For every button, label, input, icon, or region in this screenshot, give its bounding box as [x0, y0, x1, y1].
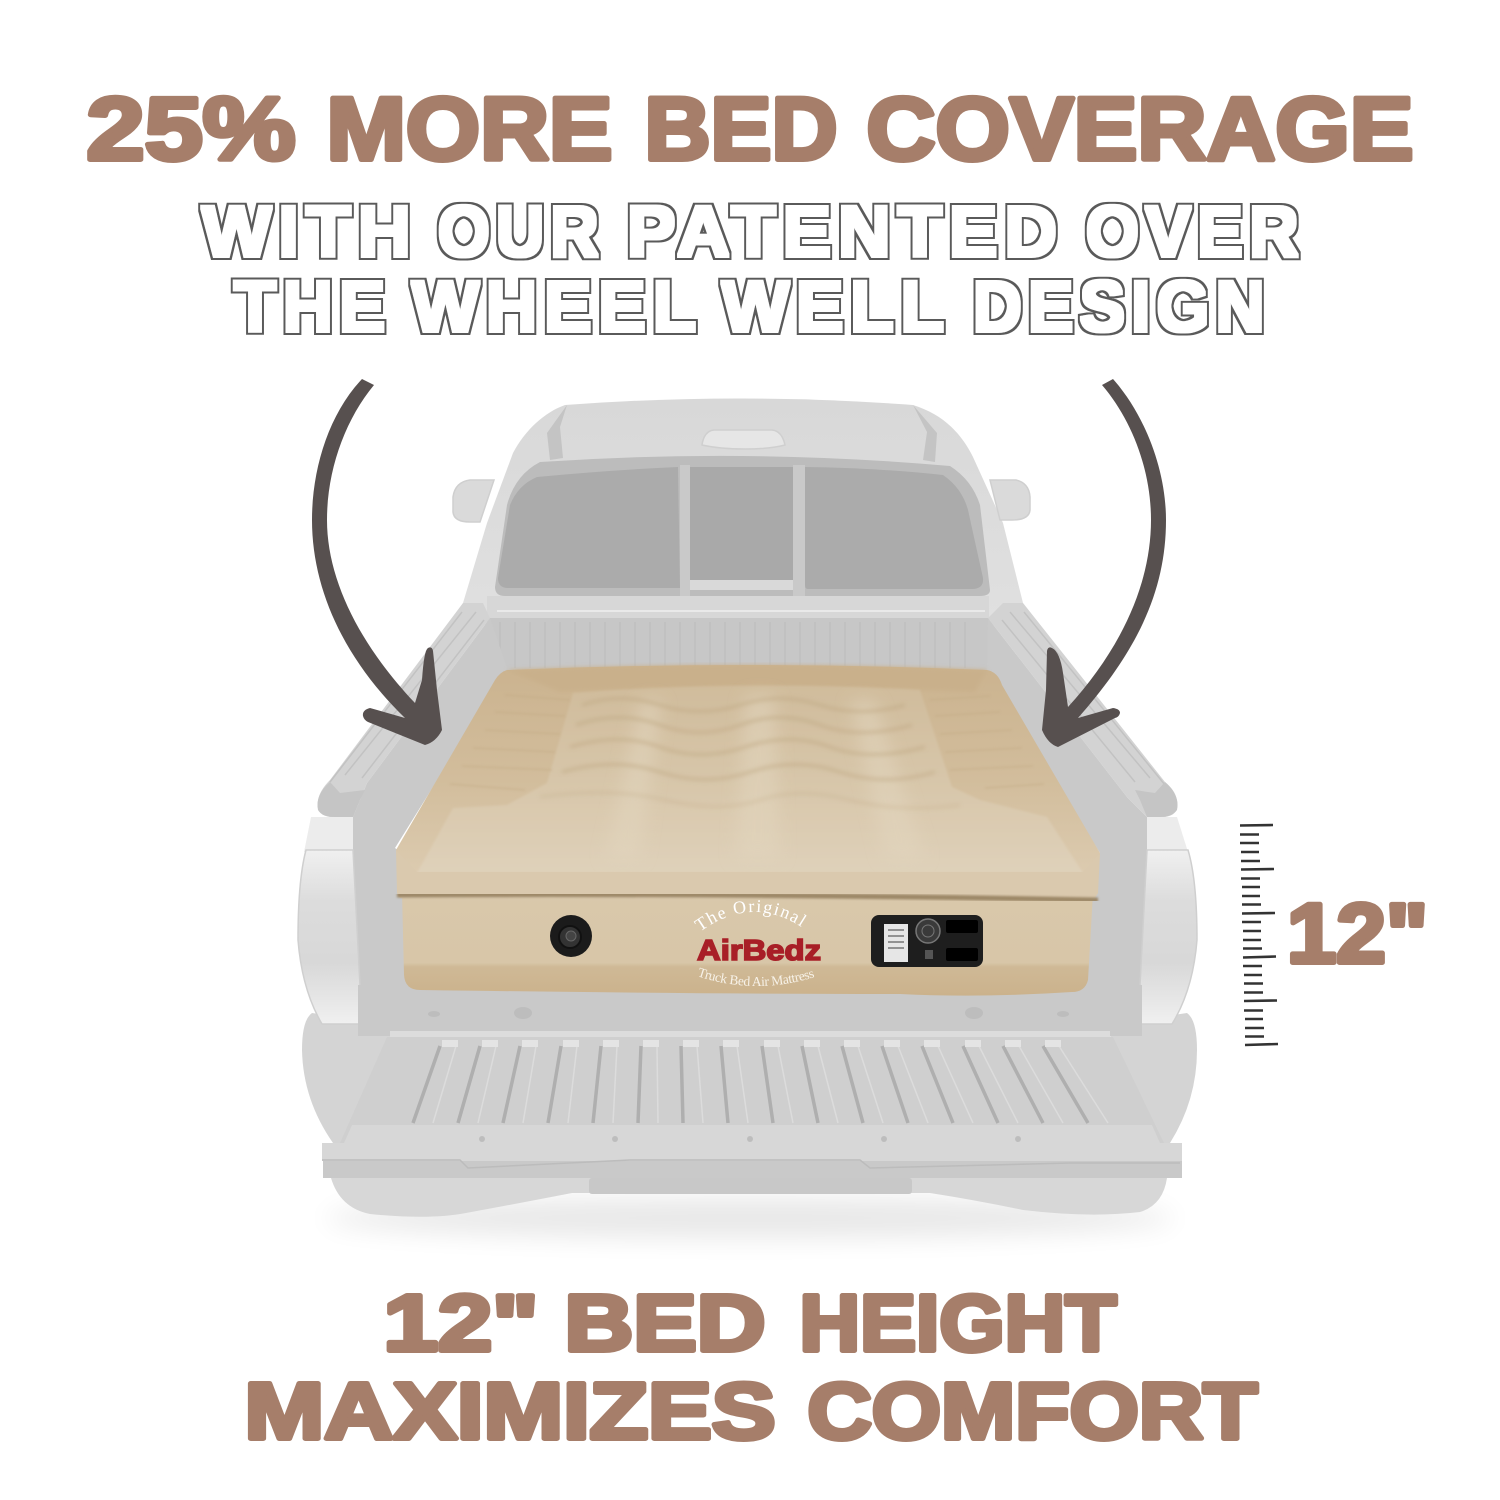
left wall: [353, 618, 507, 1000]
tailgate lip: [322, 1143, 1182, 1161]
caption: bed height: MAXIMIZES: [244, 1366, 776, 1456]
logo: AirBedz: [697, 935, 821, 967]
caption: bed height: 12": [384, 1278, 538, 1368]
caption: bed height: HEIGHT: [800, 1278, 1117, 1368]
subtitle: outlined text: PATENTED: [627, 193, 1064, 272]
left bolster ribs: [450, 695, 570, 790]
tailgate: [322, 1031, 1182, 1178]
label: 12 inches: 12": [1287, 886, 1428, 980]
caption: bed height: BED: [564, 1278, 766, 1368]
subtitle: outlined text: DESIGN: [973, 268, 1271, 347]
right wall: [987, 618, 1147, 1000]
subtitle: outlined text: WHEEL: [412, 268, 703, 347]
ground shadow: [325, 1198, 1175, 1238]
rear window: [495, 456, 990, 596]
logo: The Original: [694, 900, 806, 930]
air pump panel: [871, 915, 983, 967]
quilting light bands: [605, 695, 925, 860]
back edge shading: [507, 665, 987, 692]
right bed rail: [988, 603, 1178, 817]
front rim and seam: [396, 850, 1100, 898]
subtitle: outlined text: OVER: [1086, 193, 1305, 272]
logo: [694, 900, 821, 986]
subtitle: outlined text: [202, 193, 1305, 347]
subtitle: outlined text: THE: [234, 268, 392, 347]
rear fenders: [302, 1013, 1197, 1143]
left tail light: [298, 817, 362, 1024]
ruler: 12 inch scale: [1240, 825, 1278, 1045]
right mirror: [990, 480, 1030, 520]
truck illustration: [298, 398, 1197, 1238]
arrow: left curved: [312, 379, 442, 745]
air valve: [550, 915, 592, 957]
air mattress: [396, 662, 1100, 996]
sleeping surface: [417, 686, 1083, 873]
truck bed: [318, 596, 1178, 1000]
subtitle: outlined text: WITH: [202, 193, 418, 272]
title: 25% more bed coverage: COVERAGE: [866, 78, 1414, 178]
subtitle: outlined text: WELL: [722, 268, 951, 347]
left mirror: [453, 480, 494, 522]
left bed rail: [318, 603, 490, 817]
bumper: [331, 1178, 1167, 1217]
bed floor: [358, 985, 1142, 1036]
right bolster ribs: [930, 696, 1044, 788]
truck cab: [453, 398, 1030, 625]
title: 25% more bed coverage: [86, 78, 1414, 178]
subtitle: outlined text: OUR: [438, 193, 605, 272]
caption: bed height: COMFORT: [808, 1366, 1258, 1456]
title: 25% more bed coverage: 25%: [86, 78, 296, 178]
caption: bed height: [244, 1278, 1258, 1456]
mattress top surface: [396, 665, 1100, 875]
right tail light: [1138, 817, 1197, 1024]
quilting waves: [540, 698, 960, 808]
title: 25% more bed coverage: BED: [644, 78, 838, 178]
arrow: right curved: [1042, 379, 1166, 747]
mattress side wall: [402, 893, 1093, 996]
title: 25% more bed coverage: MORE: [326, 78, 612, 178]
logo: Truck Bed Air Mattress: [699, 968, 814, 986]
